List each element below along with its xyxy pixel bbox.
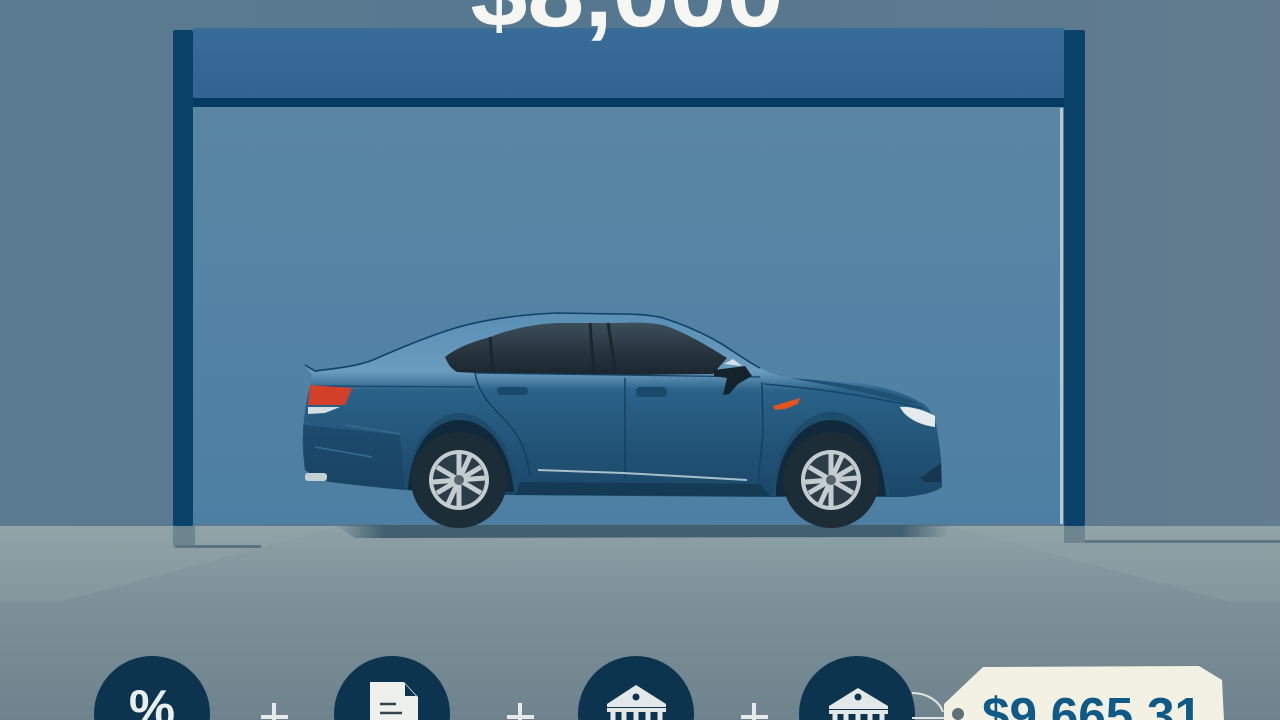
plus sign xyxy=(741,703,768,720)
side marker xyxy=(773,398,800,410)
rear panel crease xyxy=(315,425,400,457)
rear panel shading xyxy=(303,425,405,490)
rear door handle xyxy=(497,387,528,395)
exhaust xyxy=(305,473,327,481)
windows xyxy=(445,323,727,375)
front grille xyxy=(920,463,941,482)
tag shape xyxy=(944,666,1224,720)
sill xyxy=(515,482,770,496)
tail light xyxy=(308,385,352,405)
plus sign xyxy=(507,703,534,720)
side mirror xyxy=(714,366,752,395)
door seams xyxy=(475,373,763,482)
car body xyxy=(303,313,942,497)
belt line xyxy=(312,373,760,387)
icon: document xyxy=(334,656,450,720)
back panel of the gate xyxy=(193,107,1062,524)
showroom floor xyxy=(0,526,1280,720)
front wheel xyxy=(772,412,890,528)
reverse light xyxy=(308,407,340,414)
icon: bank xyxy=(578,656,694,720)
icon: bank xyxy=(799,656,915,720)
gate frame xyxy=(173,28,1280,548)
roof line highlight xyxy=(305,313,760,371)
icon: percent xyxy=(94,656,210,720)
front door handle xyxy=(636,387,667,397)
headlight xyxy=(900,407,935,427)
background wall xyxy=(0,0,1280,526)
tag hole xyxy=(952,708,964,720)
hood crease xyxy=(764,384,922,408)
car xyxy=(303,313,942,528)
car shadow xyxy=(335,525,950,538)
chrome strip xyxy=(538,470,747,480)
tag string xyxy=(912,693,945,718)
price tag xyxy=(912,666,1224,720)
rear wheel xyxy=(404,413,518,528)
plus sign xyxy=(261,703,288,720)
